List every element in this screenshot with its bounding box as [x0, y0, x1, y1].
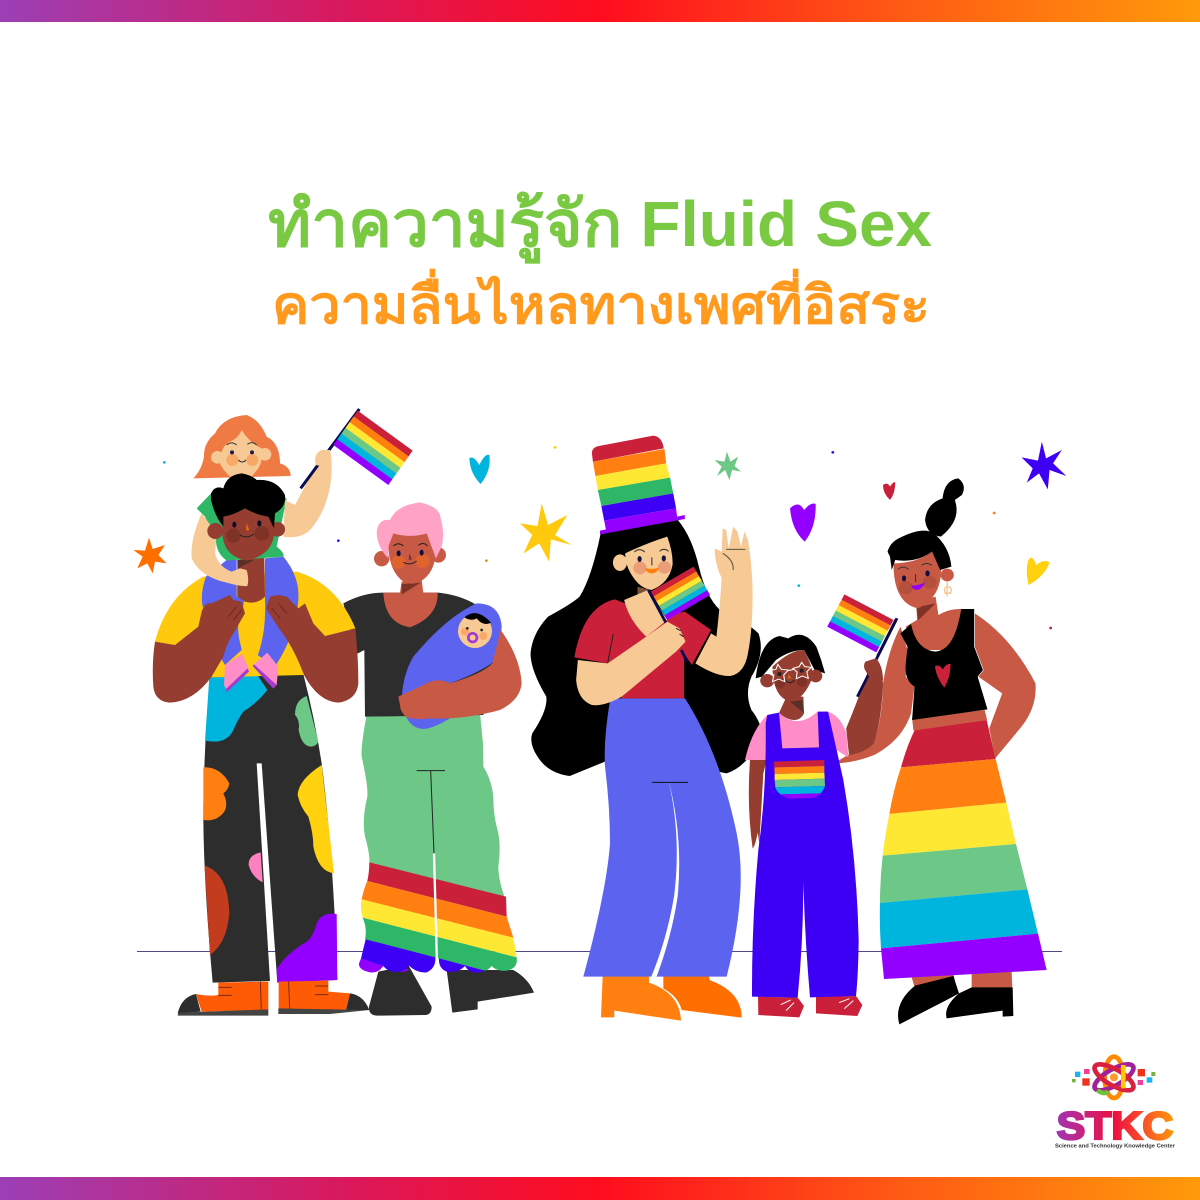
rainbow trouser hem	[359, 771, 517, 973]
ground line	[137, 951, 1062, 952]
front arm	[576, 622, 686, 705]
head with top bun	[888, 478, 964, 608]
flag held by child	[827, 594, 897, 697]
black shirt	[343, 593, 500, 717]
right arm	[975, 613, 1036, 758]
top gradient bar	[0, 0, 1200, 22]
pink shirt	[745, 712, 848, 760]
orange boots	[601, 976, 742, 1021]
title	[268, 188, 932, 335]
child head	[193, 415, 291, 478]
rainbow top hat	[592, 436, 685, 534]
overalls	[752, 712, 859, 998]
logo atom mark	[1091, 1057, 1137, 1098]
child pink shoes	[224, 653, 278, 692]
bottom gradient bar	[0, 1177, 1200, 1200]
baby in blanket	[402, 603, 502, 729]
person: tall man carrying child	[153, 409, 413, 1016]
arm behind child	[834, 627, 915, 763]
long black hair	[531, 520, 762, 776]
logo coloured squares	[1072, 1069, 1155, 1086]
neck	[779, 697, 804, 720]
midriff	[912, 710, 987, 731]
shoes	[369, 965, 534, 1016]
flag held by child	[301, 409, 413, 488]
legs	[912, 972, 1012, 988]
title: ทำความรู้จัก Fluid Sex	[268, 188, 932, 264]
man's head	[207, 473, 285, 561]
red sneakers	[758, 996, 862, 1017]
person: woman with rainbow skirt	[834, 478, 1047, 1024]
subtitle: ความลื่นไหลทางเพศที่อิสระ	[272, 269, 930, 335]
man's arms and hands	[153, 595, 358, 703]
head with star glasses	[756, 635, 825, 702]
child legs	[202, 557, 298, 667]
orange shoes	[178, 981, 369, 1016]
neck and chest	[906, 597, 961, 650]
child green shirt	[197, 493, 287, 561]
chest	[624, 590, 667, 637]
logo tagline: Science and Technology Knowledge Center	[1055, 1144, 1176, 1150]
person: pink-haired parent with baby	[343, 502, 534, 1016]
neck	[637, 587, 650, 600]
logo wordmark: STKC	[1057, 1104, 1173, 1148]
flag held at chest	[648, 567, 710, 662]
head	[374, 502, 446, 584]
green trousers	[362, 713, 505, 898]
black top	[901, 609, 987, 720]
person: child in purple overalls	[745, 594, 897, 1017]
man's neck	[237, 555, 265, 603]
rainbow pocket	[774, 760, 825, 799]
child arms	[191, 450, 332, 586]
red shirt	[574, 599, 711, 698]
logo: STKC	[1055, 1057, 1176, 1150]
confetti: stars, hearts, dots (left)	[133, 455, 490, 573]
arm	[398, 630, 522, 719]
yellow shirt	[155, 572, 355, 677]
confetti: stars, hearts, dots (right)	[520, 442, 1066, 629]
person: woman with rainbow top hat	[531, 436, 762, 1021]
waving arm	[695, 527, 753, 676]
rainbow skirt	[880, 720, 1047, 979]
left arm	[749, 760, 767, 848]
black shoes	[898, 976, 1013, 1024]
neck and chest	[383, 580, 438, 627]
raised arm	[846, 658, 883, 755]
blue trousers	[583, 698, 741, 977]
patterned trousers	[203, 674, 337, 983]
face	[613, 537, 673, 590]
